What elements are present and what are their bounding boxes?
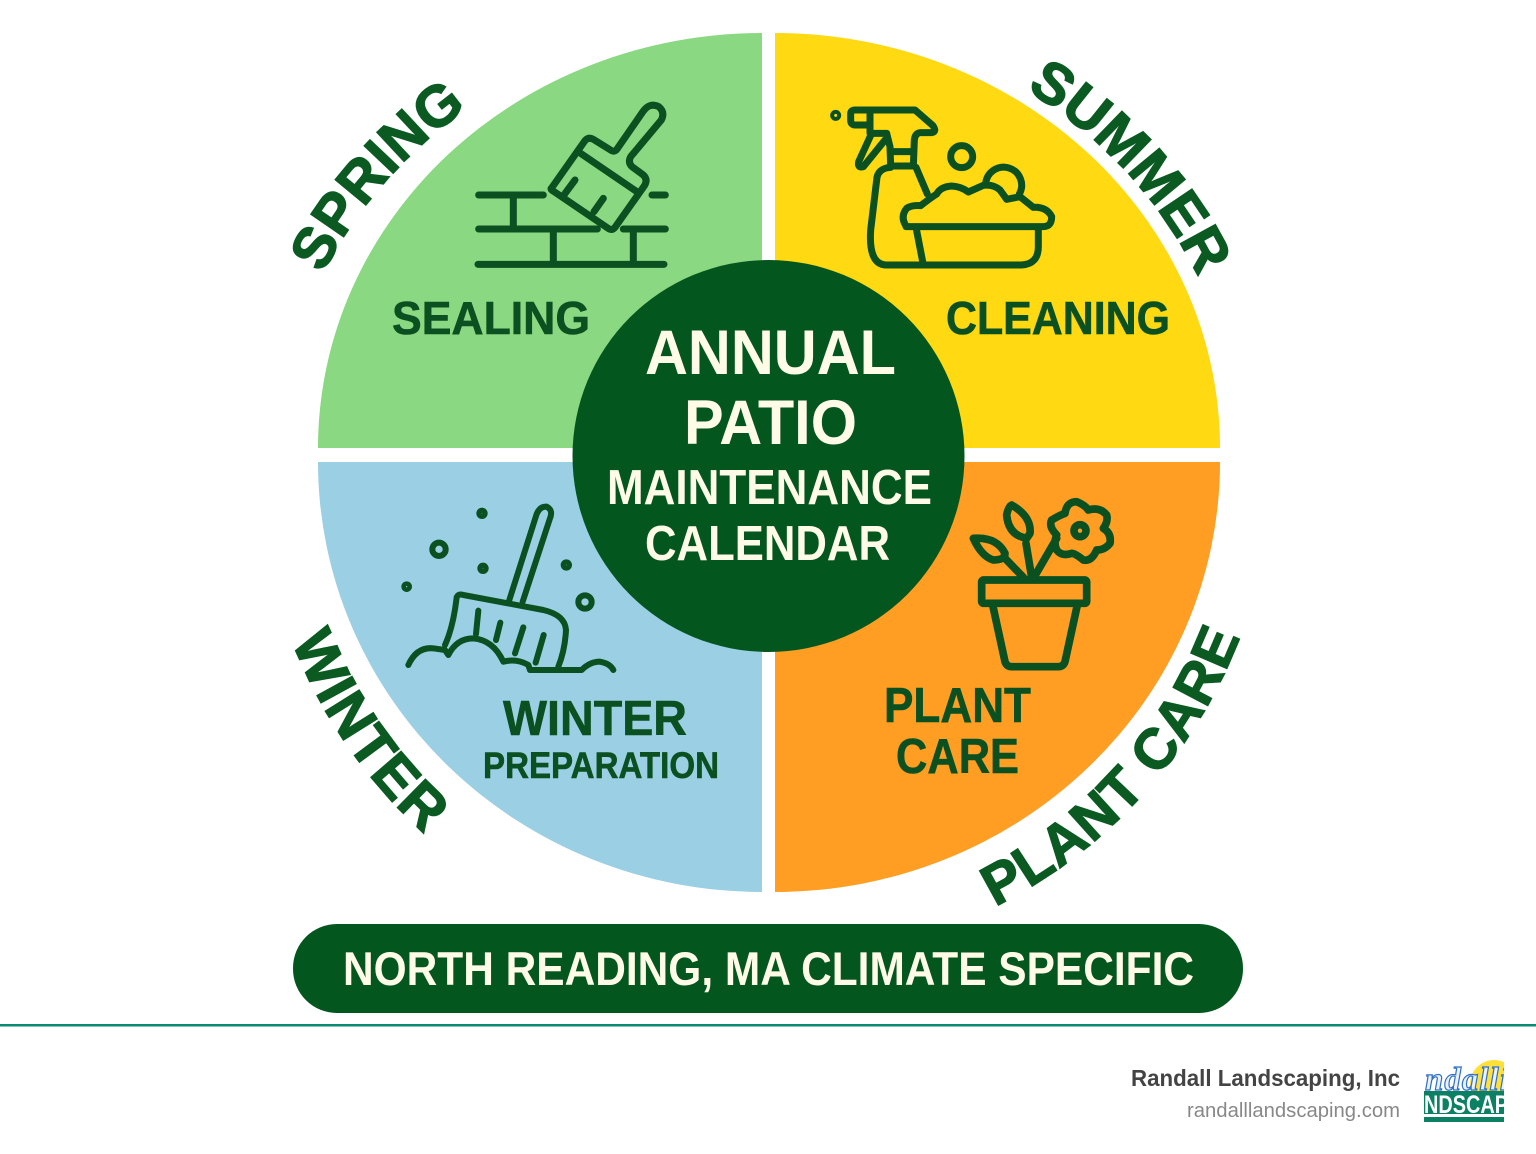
hub circle	[572, 260, 964, 652]
banner pill	[293, 924, 1243, 1013]
winter wedge	[318, 462, 762, 892]
logo script: ndalli	[1425, 1062, 1510, 1098]
curved label: winter: WINTER	[294, 624, 446, 835]
icon: broom in snow	[404, 507, 613, 670]
hub title	[607, 318, 932, 571]
banner text: NORTH READING, MA CLIMATE SPECIFIC	[343, 942, 1194, 995]
company name: Randall Landscaping, Inc	[1131, 1065, 1400, 1091]
hub title: PATIO	[684, 388, 857, 458]
footer brand text	[1131, 1065, 1400, 1122]
label: plant care	[884, 679, 1031, 784]
curved label: summer: SUMMER	[1032, 62, 1228, 278]
panel: winter quadrant	[318, 462, 762, 892]
hub title: MAINTENANCE	[607, 461, 932, 515]
summer wedge	[775, 33, 1220, 448]
logo band	[1424, 1091, 1504, 1114]
label: winter preparation: PREPARATION	[483, 745, 719, 786]
icon: potted plant	[973, 502, 1110, 667]
icon: paint brush on bricks	[478, 105, 665, 264]
website: randalllandscaping.com	[1187, 1100, 1400, 1122]
hub title: ANNUAL	[645, 318, 896, 388]
icon: spray bottle and wash tub	[834, 110, 1052, 265]
center hub	[572, 260, 964, 652]
label: plant care: PLANT	[884, 679, 1031, 733]
logo wordmark: NDSCAP	[1424, 1091, 1508, 1119]
label: sealing: SEALING	[392, 292, 590, 344]
label: plant care: CARE	[896, 730, 1019, 784]
logo stripe	[1424, 1117, 1504, 1122]
label: winter preparation: WINTER	[503, 692, 687, 746]
spring wedge	[318, 33, 762, 448]
curved label: plant care: PLANT CARE	[978, 624, 1240, 906]
label: cleaning: CLEANING	[946, 292, 1170, 344]
curved label: spring: SPRING	[292, 84, 462, 269]
panel: plant care quadrant	[775, 462, 1220, 892]
panel: summer quadrant	[775, 33, 1220, 448]
plant care wedge	[775, 462, 1220, 892]
logo	[1424, 1060, 1504, 1122]
banner: climate note	[293, 924, 1243, 1013]
hub title: CALENDAR	[645, 517, 890, 571]
label: winter preparation	[483, 692, 719, 786]
footer rule	[0, 1024, 1536, 1026]
panel: spring quadrant	[318, 33, 762, 448]
logo sun	[1470, 1060, 1504, 1091]
